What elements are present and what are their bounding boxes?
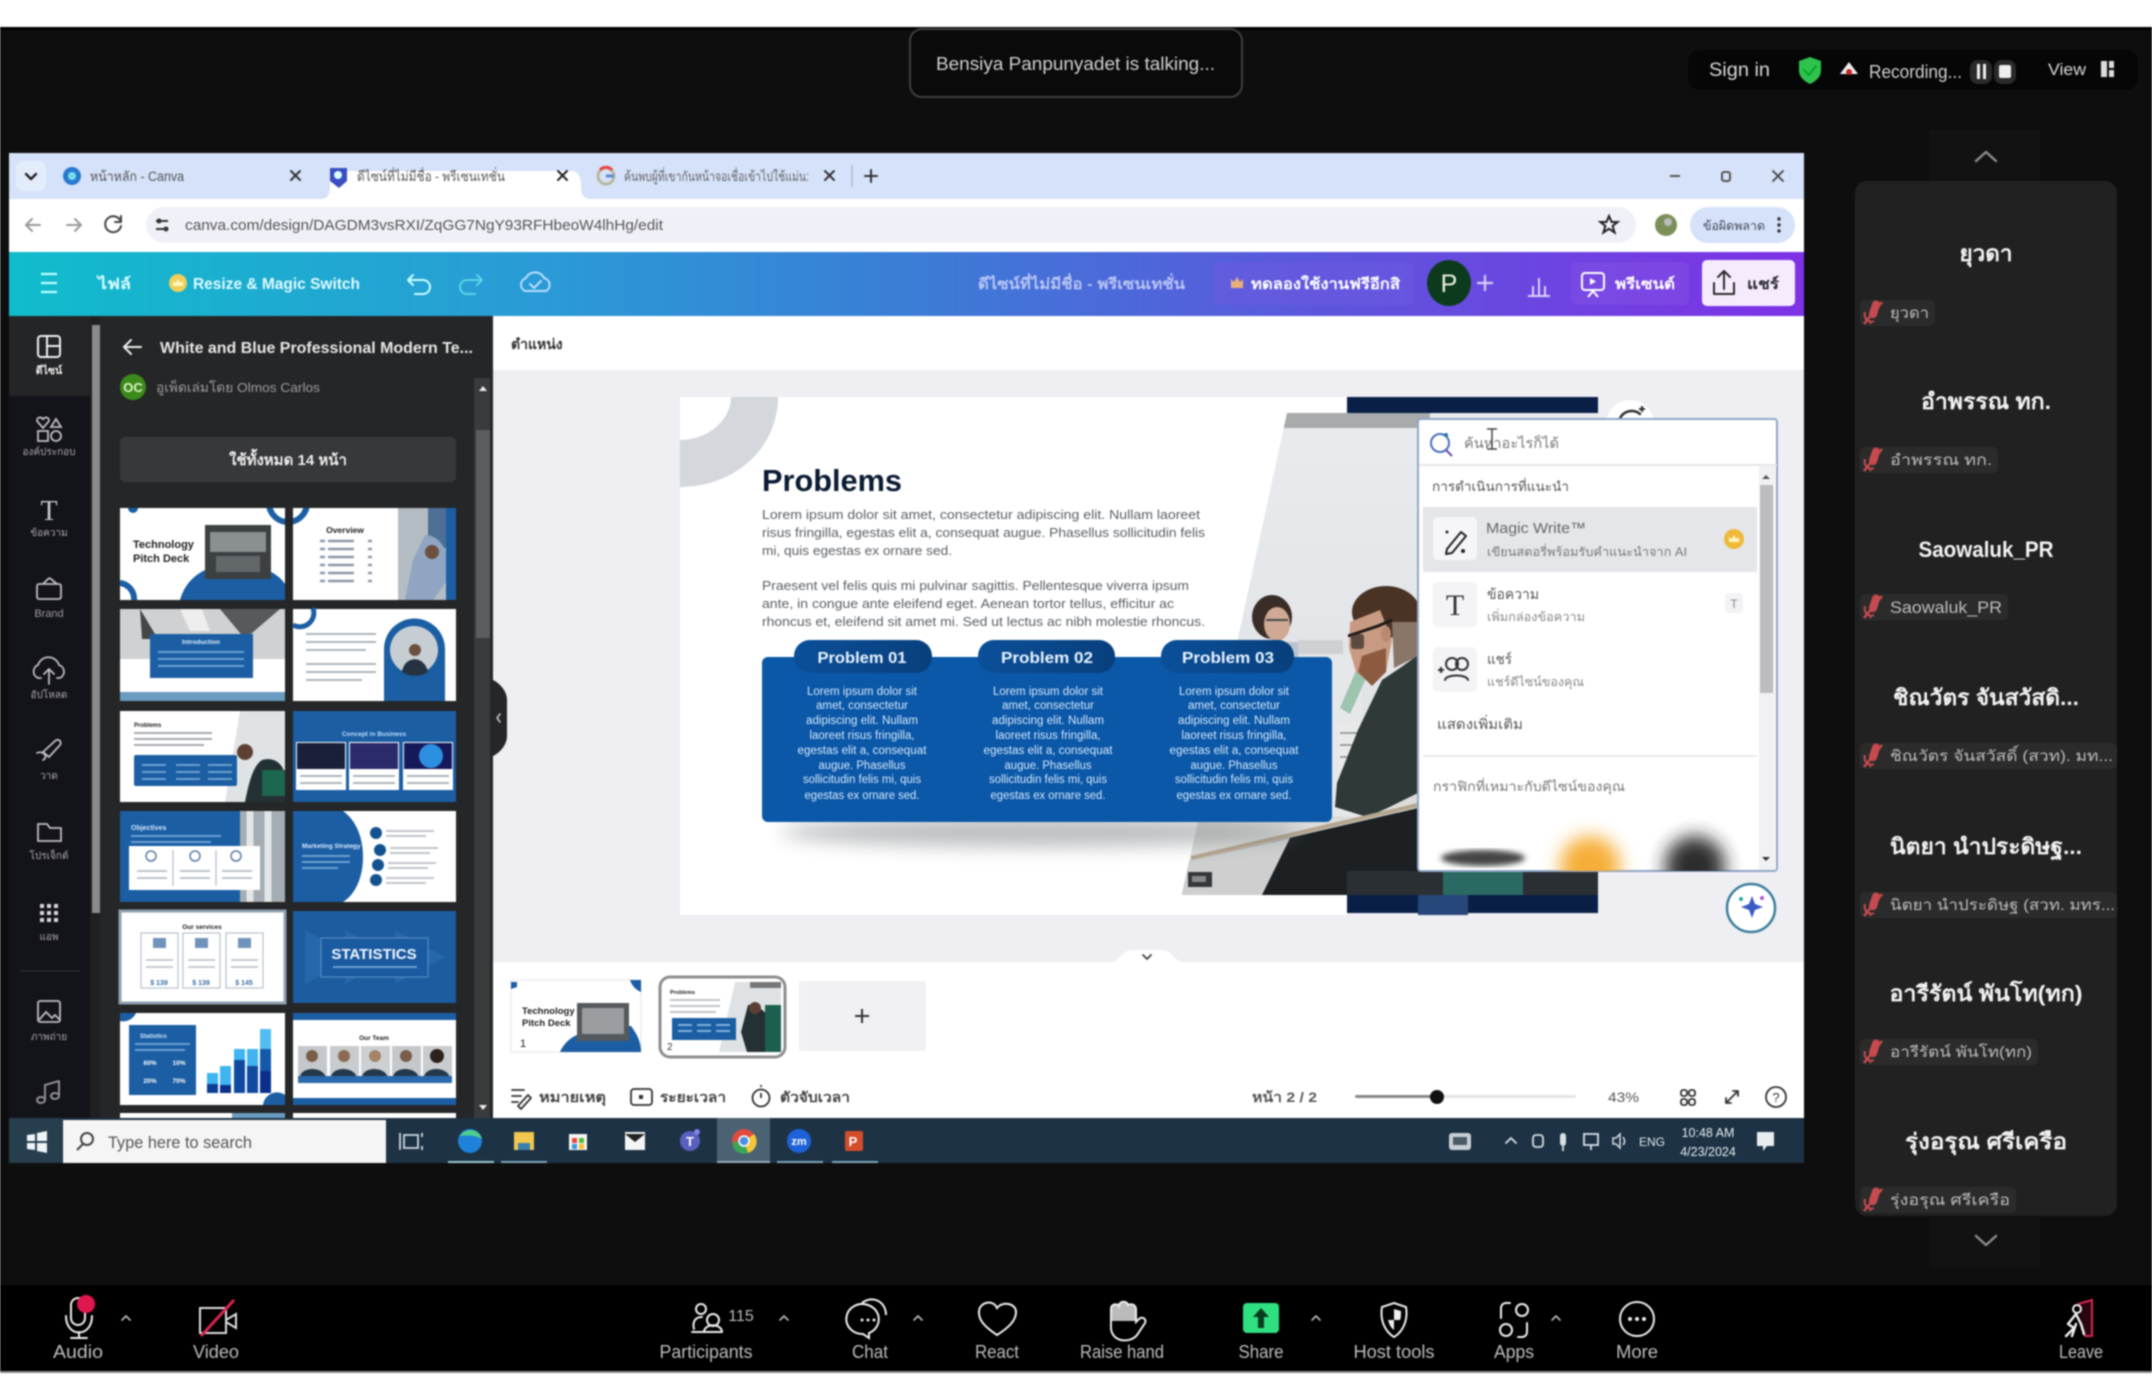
template: technology pitch deck: Technology [133, 539, 195, 551]
problem 02: amet, consectetur [1002, 700, 1094, 712]
browser tab strip [9, 153, 1804, 199]
problem 02 [978, 640, 1115, 802]
slide body copy: mi, quis egestas ex ornare sed. [762, 544, 952, 558]
rail item: brand [34, 578, 64, 620]
share button: แชร์ [1747, 275, 1780, 293]
participant: chinnawat [1860, 685, 2117, 769]
template: introduction: Introduction [182, 639, 220, 646]
store icon [569, 1134, 587, 1150]
help [1766, 1087, 1786, 1107]
timer: ตัวจับเวลา [780, 1089, 850, 1105]
browser tab strip: ดีไซน์ที่ไม่มีชื่อ - พรีเซนเทชั่น [357, 167, 505, 184]
template: technology pitch deck: Pitch Deck [133, 553, 190, 565]
template: problems [120, 711, 285, 802]
participant: chinnawat: ชิณวัตร จันสวัสดิ์ (สวท). มท... [1890, 745, 2113, 765]
problem 02: augue. Phasellus [1004, 760, 1092, 772]
rail item: music [37, 1081, 59, 1103]
template: marketing strategy [293, 811, 456, 902]
participant: rungarun: รุ่งอรุณ ศรีเครือ [1890, 1192, 2010, 1210]
panel scrollbar [474, 378, 490, 1118]
zoom icon [777, 1129, 823, 1163]
page thumbnail 1: 1 [520, 1038, 526, 1050]
quick action button [1606, 400, 1654, 448]
meeting status bar [1688, 50, 2138, 90]
dark strip under photo with green photo [1347, 871, 1598, 895]
rail item: photos: ภาพถ่าย [31, 1032, 67, 1043]
file menu: ไฟล์ [96, 274, 131, 293]
problem 01: adipiscing elit. Nullam [806, 715, 918, 727]
duration: ระยะเวลา [660, 1089, 726, 1105]
template: concept in business [293, 711, 456, 802]
problem 02: laoreet risus fringilla, [996, 730, 1100, 742]
rail item: uploads [31, 657, 67, 701]
template: statistics chart [120, 1013, 285, 1105]
notes: หมายเหตุ [539, 1089, 606, 1106]
problem 03: sollicitudin felis mi, quis [1175, 774, 1293, 786]
rail item: projects [30, 824, 68, 862]
add page button [799, 981, 926, 1051]
template author [120, 374, 321, 400]
problem 02: egestas ex ornare sed. [990, 790, 1106, 802]
talking indicator [910, 29, 1242, 97]
magic assistant button [1727, 884, 1775, 932]
problem 01 [794, 640, 932, 802]
meeting status bar: Recording... [1869, 62, 1962, 82]
page thumbnail 2 selected [660, 977, 785, 1057]
problem 02: Lorem ipsum dolor sit [993, 686, 1104, 698]
save status cloud [521, 272, 550, 291]
present button: พรีเซนต์ [1615, 275, 1675, 293]
template: statistics chart: Statistics [140, 1034, 167, 1040]
template: statistics chart: 20% [143, 1078, 157, 1085]
problem 03: augue. Phasellus [1190, 760, 1278, 772]
taskbar search [63, 1120, 386, 1163]
participant: amphon: อำพรรณ ทก. [1921, 389, 2051, 414]
problem 03: egestas elit a, consequat [1170, 745, 1299, 757]
audio control [53, 1295, 130, 1362]
share control [1238, 1303, 1320, 1362]
rail item: design: ดีไซน์ [36, 364, 63, 377]
participant: amphon [1860, 389, 2051, 473]
problem 03: egestas ex ornare sed. [1176, 790, 1292, 802]
react control [975, 1303, 1019, 1362]
taskbar search: Type here to search [108, 1133, 252, 1152]
page counter: หน้า 2 / 2 [1252, 1089, 1317, 1105]
template: technology pitch deck [118, 507, 286, 602]
trial button [1214, 262, 1413, 305]
rail item: text [30, 496, 68, 539]
man's head [1352, 586, 1420, 638]
problem 02: adipiscing elit. Nullam [992, 715, 1104, 727]
template: our services: $ 139 [150, 980, 168, 987]
slide body copy: ante, in congue ante eleifend eget. Aenean tortor tellus, efficitur ac [762, 597, 1174, 611]
windows taskbar [9, 1118, 1804, 1163]
problem 01: laoreet risus fringilla, [810, 730, 914, 742]
browser address bar [9, 199, 1804, 252]
slide body copy: Lorem ipsum dolor sit amet, consectetur adipiscing elit. Nullam laoreet [762, 508, 1201, 522]
participant: nittaya: นิตยา นำประดิษฐ (สวท. มทร... [1890, 897, 2115, 914]
template: statistics chart: 10% [172, 1060, 186, 1067]
problem 02: egestas elit a, consequat [984, 745, 1113, 757]
template: our services: Our services [182, 924, 222, 931]
template: concept in business: Concept in Business [342, 731, 407, 738]
blurred graphic suggestions [1438, 822, 1740, 872]
problem 02: sollicitudin felis mi, quis [989, 774, 1107, 786]
chrome icon [717, 1118, 770, 1163]
slide body copy: rhoncus et, eleifend sit amet mi. Sed ut lectus ac nibh molestie rhoncus. [762, 615, 1205, 629]
action: text: ข้อความ [1487, 586, 1539, 602]
help: ? [1772, 1090, 1780, 1105]
canva header bar [9, 252, 1804, 316]
editor footer bar [512, 1085, 1786, 1109]
search field [1431, 429, 1559, 456]
action: text: T [1446, 589, 1464, 622]
page thumbnail 2 selected: Problems [670, 990, 695, 996]
template: objectives: Objectives [131, 825, 167, 832]
collapse tab [1110, 950, 1184, 962]
slide body copy: Praesent vel felis quis mi pulvinar sagittis. Pellentesque viverra ipsum [762, 579, 1189, 593]
rail item: text: T [40, 496, 58, 527]
notes [512, 1089, 606, 1109]
zoom percent: 43% [1608, 1089, 1639, 1105]
participants control: 115 [728, 1308, 754, 1325]
system tray: ENG [1639, 1135, 1665, 1149]
problem 03: laoreet risus fringilla, [1182, 730, 1286, 742]
windows logo [27, 1131, 47, 1153]
timer [752, 1085, 850, 1106]
search field: ค้นหาอะไรก็ได้ [1464, 434, 1559, 451]
more control: More [1616, 1342, 1658, 1362]
template: statistics cover: STATISTICS [331, 946, 417, 963]
participant: areerat: อารีรัตน์ พันโท(ทก) [1890, 980, 2082, 1006]
template: our services: $ 145 [235, 980, 253, 987]
page thumbnail 1: Technology [522, 1006, 575, 1017]
magic search popup [1418, 419, 1777, 896]
table and floor [1290, 792, 1418, 830]
problem 01: Lorem ipsum dolor sit [807, 686, 918, 698]
rail item: elements [22, 417, 76, 458]
slide heading: Problems [762, 463, 902, 498]
file explorer icon [501, 1132, 547, 1163]
participant: nittaya [1860, 834, 2117, 918]
rail item: projects: โปรเจ็กต์ [30, 848, 68, 862]
problem 03 [1161, 640, 1299, 802]
participant: nittaya: นิตยา นำประดิษฐ... [1890, 834, 2082, 861]
meeting status bar: Sign in [1709, 60, 1770, 81]
zoom icon: zm [791, 1136, 807, 1148]
talking indicator: Bensiya Panpunyadet is talking... [936, 54, 1215, 74]
participant: areerat: อารีรัตน์ พันโท(ทก) [1890, 1043, 2032, 1061]
participant: rungarun: รุ่งอรุณ ศรีเครือ [1905, 1129, 2067, 1156]
participant: amphon: อำพรรณ ทก. [1890, 452, 1992, 469]
problem 01: egestas ex ornare sed. [804, 790, 920, 802]
browser window [9, 153, 1804, 1163]
apps control [1494, 1303, 1560, 1362]
rail item: draw [37, 740, 61, 782]
problem 03: Lorem ipsum dolor sit [1179, 686, 1290, 698]
chat control [846, 1299, 922, 1362]
action: magic write: Magic Write™ [1486, 520, 1586, 537]
edge icon [448, 1129, 494, 1163]
panel title: White and Blue Professional Modern Te... [160, 340, 473, 357]
apps control: Apps [1494, 1342, 1534, 1362]
template: introduction [120, 609, 285, 701]
participant: areerat [1860, 980, 2082, 1065]
template author: OC [123, 380, 143, 395]
template: objectives [120, 811, 285, 902]
page thumbnail 1 [511, 980, 641, 1052]
template: about us [293, 608, 456, 701]
browser tab strip: ค้นพบผู้ที่เขากันหน้าจอเชื่อเข้าไปใช้แม่น: [624, 167, 809, 185]
canvas area: ตำแหน่ง [511, 336, 563, 352]
powerpoint icon: P [849, 1134, 858, 1149]
action: share: แชร์ดีไซน์ของคุณ [1487, 675, 1584, 690]
action: text [1433, 582, 1743, 627]
template: our team: Our Team [359, 1035, 389, 1042]
template author: อูเพ็ดเล่มโดย Olmos Carlos [156, 378, 321, 396]
show more: แสดงเพิ่มเติม [1437, 715, 1523, 732]
decorative ring [680, 397, 778, 487]
template side panel [100, 316, 493, 1118]
template: overview [292, 507, 457, 601]
teams icon: T [686, 1134, 694, 1149]
problem 03: amet, consectetur [1188, 700, 1280, 712]
teams icon [680, 1129, 700, 1151]
problem 01: amet, consectetur [816, 700, 908, 712]
participants control: Participants [660, 1342, 752, 1362]
problem 02: Problem 02 [1001, 650, 1093, 667]
present button [1571, 262, 1689, 305]
suggested actions heading: การดำเนินการที่แนะนำ [1432, 478, 1569, 494]
share control: Share [1238, 1342, 1284, 1362]
raise hand control: Raise hand [1080, 1342, 1164, 1362]
use all pages button: ใช้ทั้งหมด 14 หน้า [229, 448, 347, 469]
participant: chinnawat: ชิณวัตร จันสวัสดิ... [1893, 685, 2079, 710]
template: marketing strategy: Marketing Strategy [302, 843, 361, 850]
share button [1702, 260, 1795, 306]
zoom toolbar [0, 1285, 2152, 1373]
host tools control: Host tools [1354, 1342, 1434, 1362]
graphics heading: กราฟิกที่เหมาะกับดีไซน์ของคุณ [1433, 778, 1625, 795]
grid view [1681, 1090, 1695, 1105]
undo and redo [408, 275, 482, 294]
action: share [1433, 647, 1584, 692]
participant: saowaluk: Saowaluk_PR [1918, 537, 2054, 562]
template: problems: Problems [134, 723, 162, 729]
canva left rail [9, 316, 100, 1118]
raise hand control [1080, 1302, 1164, 1362]
audio control: Audio [53, 1342, 103, 1362]
rail item: draw: วาด [40, 771, 58, 782]
react control: React [975, 1342, 1019, 1362]
chat control: Chat [852, 1342, 888, 1362]
slide body copy [762, 508, 1205, 629]
participant: yuwada [1860, 241, 2012, 326]
action: text: T [1730, 597, 1738, 611]
rail item: text: ข้อความ [30, 527, 68, 539]
host tools control [1354, 1303, 1434, 1362]
popup scrollbar [1759, 466, 1775, 870]
participant: yuwada: ยุวดา [1960, 241, 2012, 268]
participant: saowaluk: Saowaluk_PR [1890, 598, 2002, 617]
rail item: uploads: อัปโหลด [31, 688, 67, 701]
template: statistics cover [293, 911, 456, 1003]
problem 03: Problem 03 [1182, 650, 1274, 667]
template: our team [293, 1013, 456, 1105]
browser address bar: canva.com/design/DAGDM3vsRXI/ZqGG7NgY93RFHbeoW4lhHg/edit [185, 217, 664, 234]
woman in background [1252, 595, 1292, 639]
meeting status bar: View [2048, 60, 2087, 79]
slide [680, 397, 1600, 915]
blue problem card [762, 640, 1332, 847]
participants control [660, 1304, 788, 1362]
zoom slider [1355, 1090, 1576, 1104]
menu icon [41, 274, 57, 292]
video control [193, 1300, 239, 1362]
problem 01: augue. Phasellus [818, 760, 906, 772]
rail item: design [36, 336, 63, 377]
colleague shirt and papers [1298, 640, 1343, 654]
template: overview: Overview [326, 525, 364, 535]
page thumbnail 2 selected: 2 [667, 1042, 673, 1053]
thumbnail strip [493, 950, 1804, 1118]
document title: ดีไซน์ที่ไม่มีชื่อ - พรีเซนเทชั่น [978, 273, 1186, 293]
resize and magic switch: Resize & Magic Switch [193, 276, 360, 293]
leave control: Leave [2059, 1342, 2103, 1362]
trial button: ทดลองใช้งานฟรีอีกสิ [1251, 275, 1401, 293]
photo [1180, 397, 1600, 897]
slide body copy: risus fringilla, egestas elit a, consequat augue. Phasellus sollicitudin felis [762, 526, 1205, 540]
problem 01: egestas elit a, consequat [798, 745, 927, 757]
template: statistics chart: 60% [143, 1060, 157, 1067]
browser tab strip: หน้าหลัก - Canva [90, 169, 184, 184]
mail icon [625, 1132, 645, 1150]
scroll arrow up [1930, 130, 2040, 182]
rail item: brand: Brand [34, 608, 64, 620]
canvas area [493, 316, 1804, 1118]
system tray: 4/23/2024 [1680, 1145, 1736, 1159]
rail item: apps: แอพ [39, 932, 59, 943]
rail item: elements: องค์ประกอบ [22, 446, 76, 458]
duration [631, 1089, 726, 1105]
action: text: เพิ่มกล่องข้อความ [1487, 608, 1585, 624]
template: our services: $ 139 [192, 980, 210, 987]
insights icon [1528, 278, 1550, 296]
template: our services [120, 911, 285, 1003]
leave control [2059, 1300, 2103, 1362]
panel collapse handle [493, 680, 507, 756]
more control [1616, 1302, 1658, 1362]
scroll arrow down [1930, 1217, 2040, 1267]
task view [400, 1133, 422, 1150]
user avatar: P [1441, 270, 1457, 298]
action: magic write [1423, 507, 1757, 572]
powerpoint icon [832, 1131, 878, 1163]
page thumbnail 1: Pitch Deck [522, 1018, 571, 1029]
template: statistics chart: 70% [172, 1078, 186, 1085]
browser address bar: ข้อผิดพลาด [1703, 219, 1765, 233]
system tray [1449, 1126, 1774, 1159]
system tray: 10:48 AM [1682, 1126, 1734, 1140]
participant: saowaluk [1860, 537, 2054, 620]
video control: Video [193, 1342, 239, 1362]
action: magic write: เขียนสตอรี่พร้อมรับคำแนะนำจาก AI [1487, 543, 1687, 559]
man's torso [1335, 655, 1418, 817]
rail item: apps [39, 904, 59, 943]
participants panel [1855, 130, 2117, 1267]
problem 03: adipiscing elit. Nullam [1178, 715, 1290, 727]
action: share: แชร์ [1487, 651, 1512, 667]
problem 01: sollicitudin felis mi, quis [803, 774, 921, 786]
fullscreen [1726, 1091, 1738, 1103]
user avatar [1427, 260, 1471, 306]
problem 01: Problem 01 [818, 650, 907, 667]
rail item: photos [31, 1001, 67, 1043]
use all pages button [120, 437, 456, 482]
add collaborator [1477, 275, 1493, 291]
dark back panel [1347, 397, 1598, 913]
participant: yuwada: ยุวดา [1890, 305, 1929, 323]
participant: rungarun [1860, 1129, 2067, 1213]
template row cut off by taskbar [120, 1113, 456, 1118]
